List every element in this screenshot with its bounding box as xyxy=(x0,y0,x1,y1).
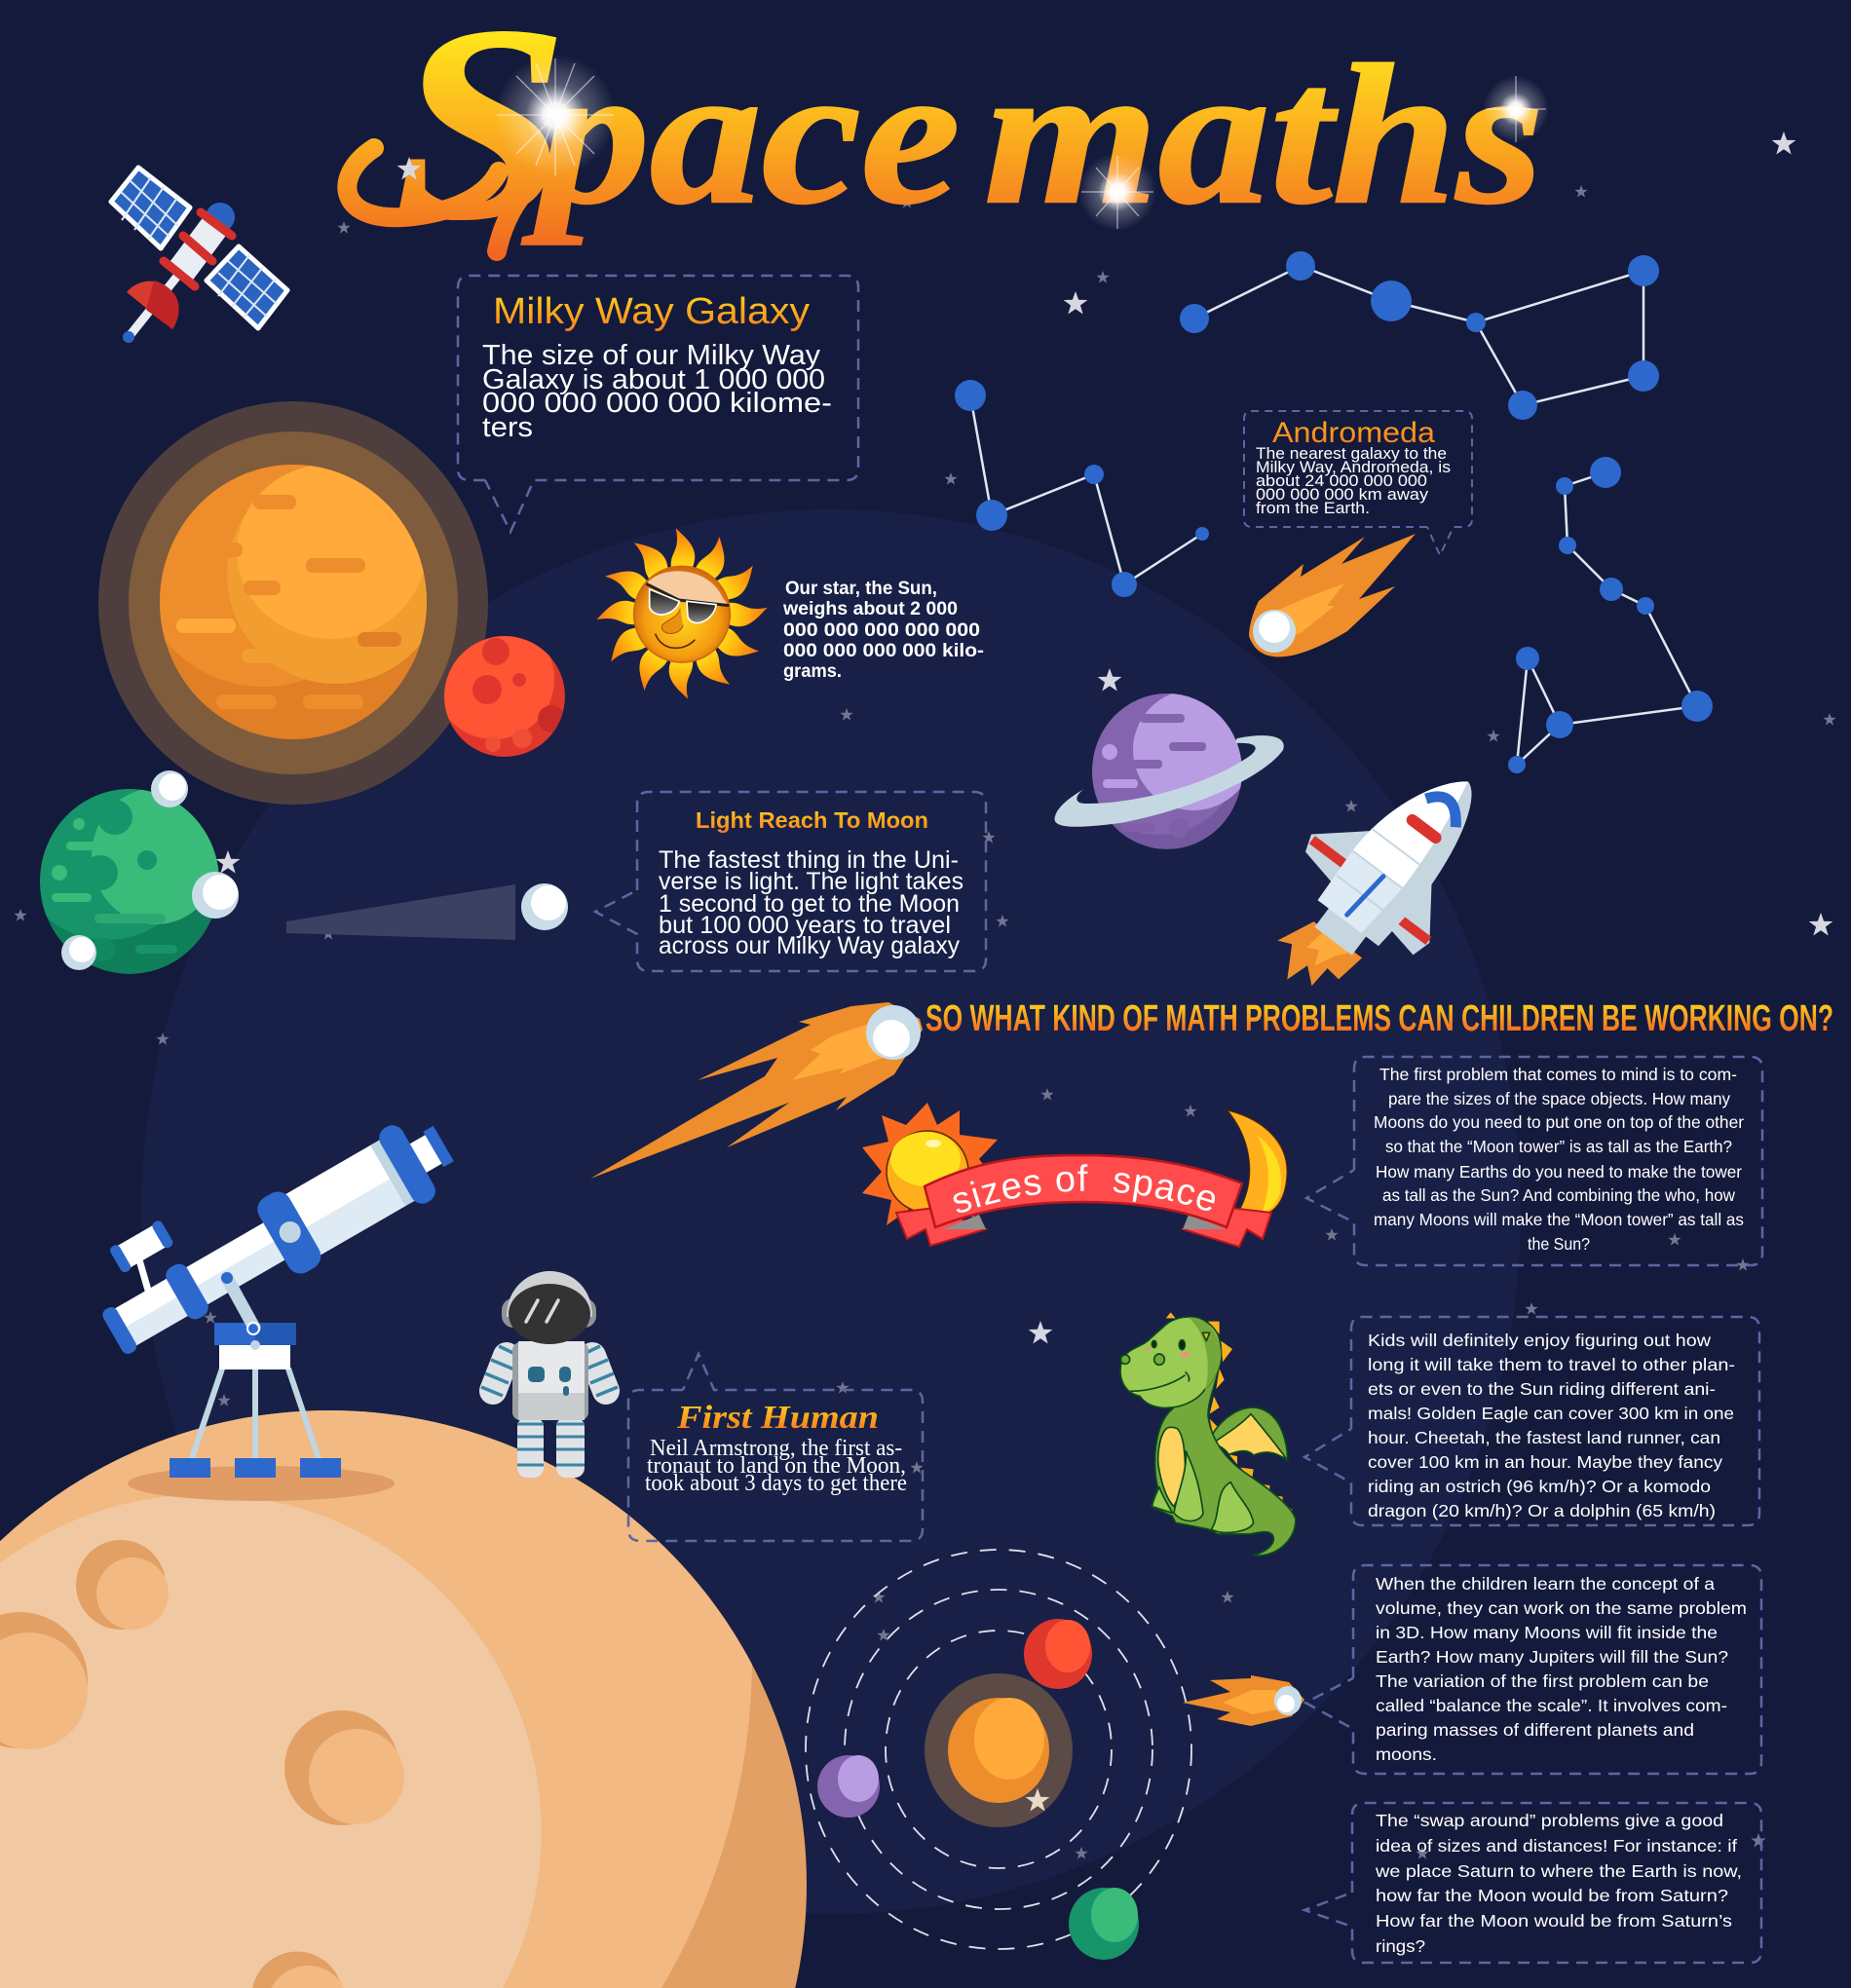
purple planet xyxy=(817,1755,880,1818)
small moons xyxy=(61,770,239,970)
icon: astronaut xyxy=(481,1271,618,1478)
wing xyxy=(1213,1407,1288,1460)
heading: Light Reach To Moon xyxy=(696,807,928,833)
body text: 000 000 000 km away xyxy=(1256,486,1429,504)
body xyxy=(1316,751,1494,950)
green planet xyxy=(1069,1888,1139,1960)
red planet xyxy=(1024,1619,1092,1689)
body text: the Sun? xyxy=(1528,1234,1590,1254)
heading: Andromeda xyxy=(1272,417,1435,449)
body text: cover 100 km in an hour. Maybe they fancy xyxy=(1368,1452,1722,1472)
body text: The size of our Milky Way xyxy=(482,340,821,371)
panel: sizes text xyxy=(1306,1057,1762,1265)
body text: but 100 000 years to travel xyxy=(659,912,951,939)
heading: Milky Way Galaxy xyxy=(493,291,810,332)
stand xyxy=(214,1323,296,1369)
body text xyxy=(1376,1574,1747,1764)
moon surface xyxy=(0,1403,818,1988)
panel: swap around text xyxy=(1304,1803,1761,1963)
body text: ets or even to the Sun riding different ani- xyxy=(1368,1379,1716,1399)
body text: How far the Moon would be from Saturn’s xyxy=(1376,1911,1732,1931)
title swash xyxy=(347,148,531,251)
body text: took about 3 days to get there xyxy=(645,1471,907,1496)
solar panels xyxy=(111,168,287,328)
title sparkle xyxy=(1483,76,1549,142)
body text: called “balance the scale”. It involves com- xyxy=(1376,1696,1727,1715)
ribbon tails xyxy=(896,1208,1271,1247)
title star xyxy=(397,157,421,180)
panel: Andromeda xyxy=(1244,411,1472,555)
icon: telescope xyxy=(92,1107,465,1478)
body text: rings? xyxy=(1376,1936,1425,1956)
helmet xyxy=(502,1271,596,1344)
body text: riding an ostrich (96 km/h)? Or a komodo xyxy=(1368,1477,1711,1496)
text: sun weight: 000 000 000 000 kilo- xyxy=(783,641,984,661)
arms xyxy=(481,1346,618,1396)
body text: in 3D. How many Moons will fit inside the xyxy=(1376,1623,1718,1642)
body text: mals! Golden Eagle can cover 300 km in one xyxy=(1368,1404,1734,1423)
icon: moon xyxy=(521,883,568,930)
body text: 1 second to get to the Moon xyxy=(659,890,960,918)
icon: orange planet xyxy=(98,401,488,805)
panel: Light Reach To Moon xyxy=(595,792,986,971)
body text xyxy=(659,846,963,959)
face xyxy=(1179,1340,1185,1350)
body text: The first problem that comes to mind is to com- xyxy=(1379,1065,1737,1084)
body text: The fastest thing in the Uni- xyxy=(659,846,959,874)
body text: hour. Cheetah, the fastest land runner, can xyxy=(1368,1428,1720,1447)
text: sun weight: 000 000 000 000 000 xyxy=(783,620,980,641)
body text: ters xyxy=(482,412,533,443)
crescent moon xyxy=(1228,1110,1287,1216)
callout box xyxy=(595,792,986,971)
spines xyxy=(1166,1312,1293,1513)
legs xyxy=(191,1369,320,1461)
ribbon xyxy=(925,1155,1242,1227)
body text: so that the “Moon tower” is as tall as the Earth? xyxy=(1385,1137,1732,1156)
title sparkle xyxy=(1078,153,1156,231)
body text: we place Saturn to where the Earth is now, xyxy=(1375,1861,1742,1881)
crater xyxy=(0,1612,88,1749)
body text: verse is light. The light takes xyxy=(659,868,963,895)
satellite body xyxy=(123,203,235,343)
body text: The “swap around” problems give a good xyxy=(1376,1811,1723,1830)
body text xyxy=(1374,1065,1744,1254)
mount arm xyxy=(221,1272,259,1334)
body text xyxy=(482,340,832,443)
panel: volume text xyxy=(1305,1565,1761,1774)
heading: First Human xyxy=(676,1400,879,1436)
body text xyxy=(1256,445,1451,517)
orbits xyxy=(806,1550,1191,1949)
icon: comet near Andromeda xyxy=(1249,534,1416,656)
panel: animals text xyxy=(1304,1317,1759,1525)
text: sun weight: weighs about 2 000 xyxy=(782,599,958,619)
body text: Milky Way, Andromeda, is xyxy=(1256,459,1451,476)
callout box xyxy=(1305,1565,1761,1774)
panel: First Human xyxy=(628,1354,923,1541)
icon: small comet xyxy=(1183,1675,1304,1726)
flame xyxy=(1263,911,1362,1008)
callout box xyxy=(1306,1057,1762,1265)
callout box xyxy=(1304,1803,1761,1963)
head xyxy=(1120,1317,1221,1407)
callout box xyxy=(1244,411,1472,555)
body text: moons. xyxy=(1376,1744,1437,1764)
belly xyxy=(1158,1427,1186,1507)
body text: paring masses of different planets and xyxy=(1376,1720,1694,1740)
icon: satellite xyxy=(111,168,287,343)
crater xyxy=(252,1952,345,1988)
icon: red planet xyxy=(444,636,565,757)
body text: from the Earth. xyxy=(1256,500,1370,517)
constellation: top xyxy=(1180,251,1659,420)
constellation: right xyxy=(1508,457,1713,773)
body text: across our Milky Way galaxy xyxy=(659,932,960,959)
background large circle xyxy=(141,509,1521,1914)
crater xyxy=(76,1540,169,1630)
title xyxy=(347,0,1549,277)
icon: rocket xyxy=(1232,726,1521,1034)
finder scope xyxy=(108,1219,174,1300)
body text xyxy=(1368,1331,1735,1520)
body text: idea of sizes and distances! For instance: if xyxy=(1376,1836,1737,1856)
body text: pare the sizes of the space objects. How many xyxy=(1388,1089,1730,1108)
body text: The nearest galaxy to the xyxy=(1256,445,1447,463)
callout box xyxy=(458,276,858,532)
title text: maths xyxy=(984,24,1543,245)
body text: dragon (20 km/h)? Or a dolphin (65 km/h) xyxy=(1368,1501,1716,1520)
body text: How many Earths do you need to make the tower xyxy=(1376,1162,1742,1182)
text: sun weight xyxy=(782,579,984,682)
legs xyxy=(517,1417,585,1478)
constellation: left xyxy=(955,380,1209,597)
body text: volume, they can work on the same problem xyxy=(1376,1598,1747,1618)
body text: as tall as the Sun? And combining the who, how xyxy=(1382,1185,1735,1205)
icon: solar system xyxy=(806,1550,1191,1960)
icon: big comet xyxy=(590,1002,923,1179)
body text: many Moons will make the “Moon tower” as tall as xyxy=(1374,1210,1744,1229)
icon: sizes of space banner xyxy=(862,1103,1288,1249)
banner text: sizes of space xyxy=(953,1164,1215,1213)
icon: sun with sunglasses xyxy=(596,528,768,699)
icon: green planet xyxy=(19,770,239,974)
body text: 000 000 000 000 kilome- xyxy=(482,388,832,419)
central sun xyxy=(925,1673,1073,1827)
body text: Galaxy is about 1 000 000 xyxy=(482,364,825,395)
icon: ringed planet xyxy=(1054,694,1284,849)
body text: about 24 000 000 000 xyxy=(1256,472,1427,490)
body text: Neil Armstrong, the first as- xyxy=(650,1436,902,1461)
body text: tronaut to land on the Moon, xyxy=(647,1453,906,1479)
legs xyxy=(1174,1451,1203,1521)
tube xyxy=(92,1107,465,1371)
body text: how far the Moon would be from Saturn? xyxy=(1376,1886,1728,1905)
body text xyxy=(1375,1811,1742,1956)
panel: Milky Way Galaxy xyxy=(458,276,858,532)
icon: light beam xyxy=(286,884,515,940)
body text: When the children learn the concept of a xyxy=(1376,1574,1715,1594)
callout box xyxy=(1304,1317,1759,1525)
body text: long it will take them to travel to other plan- xyxy=(1368,1355,1735,1374)
small sun xyxy=(862,1103,998,1231)
crater xyxy=(284,1710,404,1825)
feet xyxy=(170,1458,341,1478)
body text xyxy=(645,1436,907,1496)
body text: Earth? How many Jupiters will fill the Sun? xyxy=(1376,1647,1728,1667)
callout box xyxy=(628,1354,923,1541)
fins xyxy=(1290,800,1464,958)
body xyxy=(1152,1351,1296,1556)
body text: Kids will definitely enjoy figuring out how xyxy=(1368,1331,1711,1350)
title text: pace xyxy=(521,24,961,245)
title sparkle xyxy=(495,55,616,175)
body text: Moons do you need to put one on top of the other xyxy=(1374,1112,1744,1132)
text: sun weight: Our star, the Sun, xyxy=(785,579,937,599)
icon: dragon xyxy=(1120,1312,1296,1556)
torso xyxy=(512,1341,588,1420)
text: sun weight: grams. xyxy=(783,661,842,682)
body text: The variation of the first problem can be xyxy=(1376,1671,1709,1691)
